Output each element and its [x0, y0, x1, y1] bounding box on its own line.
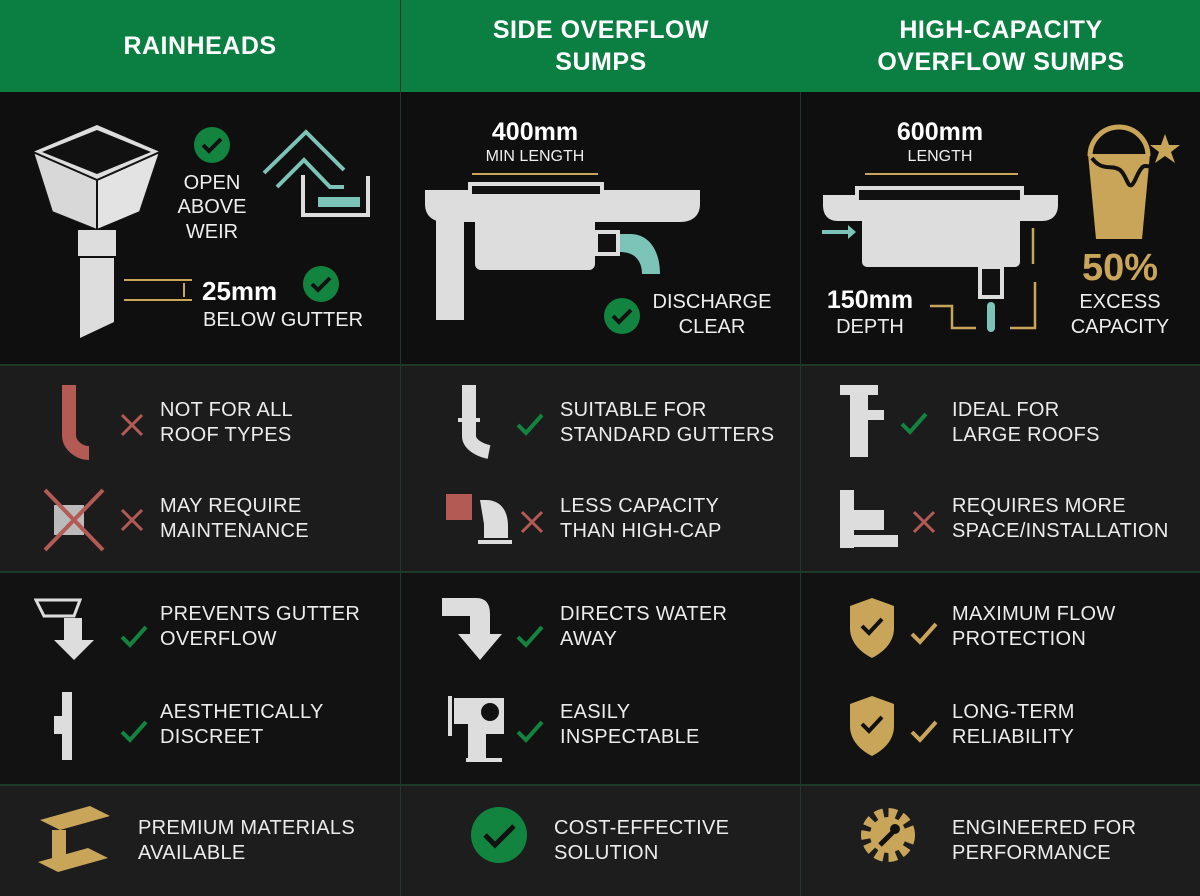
item: prevents gutter overflow [34, 598, 360, 660]
text: open above weir: OPEN [184, 172, 240, 194]
dimension: 25mm [124, 280, 192, 300]
item: long-term reliability: LONG-TERM [952, 701, 1075, 723]
item: prevents gutter overflow: OVERFLOW [160, 628, 277, 650]
item: not for all roof types [62, 385, 293, 460]
text: 150mm depth: 150mm [827, 286, 913, 314]
item: long-term reliability [850, 696, 1075, 756]
text: 25mm below gutter: BELOW GUTTER [203, 309, 363, 331]
item: easily inspectable: INSPECTABLE [560, 726, 700, 748]
text: 50% excess capacity: EXCESS [1079, 291, 1161, 313]
text: open above weir: ABOVE [178, 196, 246, 218]
item: ideal for large roofs: LARGE ROOFS [952, 424, 1100, 446]
item: requires more space: SPACE/INSTALLATION [952, 520, 1169, 542]
panel: high-capacity diagram [822, 118, 1180, 338]
item: less capacity: LESS CAPACITY [560, 495, 719, 517]
footer: premium materials: PREMIUM MATERIALS [138, 817, 355, 839]
item: not for all roof types: ROOF TYPES [160, 424, 292, 446]
text: discharge clear [653, 291, 771, 338]
item: easily inspectable [448, 696, 700, 762]
text: open above weir: WEIR [186, 221, 238, 243]
header: rainheads: RAINHEADS [123, 32, 277, 60]
item: requires more space [840, 490, 1169, 548]
panel: side overflow sump diagram [425, 118, 771, 338]
text: open above weir [178, 172, 246, 243]
footer: engineered for performance: PERFORMANCE [952, 842, 1111, 864]
header: side overflow sumps [401, 0, 801, 92]
header: rainheads [0, 0, 400, 92]
item: directs water away [442, 598, 727, 660]
text: 600mm: 600mm [897, 118, 983, 146]
text: 25mm below gutter: 25mm [202, 276, 277, 306]
footer: engineered for performance: ENGINEERED FOR [952, 817, 1136, 839]
text: 50% excess capacity: 50% [1082, 247, 1158, 289]
row backgrounds [0, 92, 1200, 365]
header: high-capacity overflow sumps [801, 0, 1200, 92]
item: maximum flow protection: MAXIMUM FLOW [952, 603, 1116, 625]
text: 400mm [486, 118, 584, 165]
footer: cost-effective solution: COST-EFFECTIVE [554, 817, 729, 839]
header: high-capacity overflow sumps: HIGH-CAPACITY [899, 16, 1103, 44]
text: 600mm [897, 118, 983, 165]
text: discharge clear: DISCHARGE [653, 291, 771, 313]
icon: check open above weir [194, 127, 230, 163]
item: suitable for standard gutters: STANDARD GUTTERS [560, 424, 774, 446]
footer: premium materials: AVAILABLE [138, 842, 246, 864]
icon: bucket [1088, 127, 1180, 239]
header: high-capacity overflow sumps: OVERFLOW SUMPS [877, 48, 1125, 76]
item: less capacity [446, 494, 722, 544]
text: 400mm: MIN LENGTH [486, 148, 584, 165]
footer: cost-effective solution: SOLUTION [554, 842, 659, 864]
item: easily inspectable: EASILY [560, 701, 630, 723]
text: 600mm: LENGTH [908, 148, 972, 165]
footer: engineered for performance [861, 808, 1136, 864]
header: side overflow sumps: SUMPS [555, 48, 647, 76]
panel: rainhead diagram [34, 125, 370, 338]
icon: large sump [822, 188, 1058, 332]
text: 25mm below gutter [202, 276, 363, 331]
icon: rainhead [33, 125, 160, 338]
item: maximum flow protection: PROTECTION [952, 628, 1086, 650]
item: may require maintenance: MAINTENANCE [160, 520, 309, 542]
item: directs water away: DIRECTS WATER [560, 603, 727, 625]
icon: sump [425, 184, 700, 320]
text: 50% excess capacity: CAPACITY [1071, 316, 1169, 338]
text: 150mm depth [827, 286, 913, 338]
footer: premium materials [38, 806, 355, 872]
item: suitable for standard gutters: SUITABLE FOR [560, 399, 707, 421]
item: less capacity: THAN HIGH-CAP [560, 520, 722, 542]
item: aesthetically discreet: AESTHETICALLY [160, 701, 324, 723]
item: aesthetically discreet: DISCREET [160, 726, 264, 748]
icon: check discharge [604, 298, 640, 334]
header: side overflow sumps: SIDE OVERFLOW [493, 16, 709, 44]
item: requires more space: REQUIRES MORE [952, 495, 1126, 517]
item: not for all roof types: NOT FOR ALL [160, 399, 293, 421]
text: 150mm depth: DEPTH [836, 316, 904, 338]
icon: check 25mm [303, 266, 339, 302]
item: directs water away: AWAY [560, 628, 617, 650]
item: maximum flow protection [850, 598, 1116, 658]
item: may require maintenance: MAY REQUIRE [160, 495, 301, 517]
text: 50% excess capacity [1071, 247, 1169, 338]
icon: weir overflow [264, 132, 368, 215]
item: prevents gutter overflow: PREVENTS GUTTER [160, 603, 360, 625]
text: discharge clear: CLEAR [679, 316, 745, 338]
footer: cost-effective solution [471, 807, 729, 864]
item: aesthetically discreet [54, 692, 324, 760]
item: ideal for large roofs: IDEAL FOR [952, 399, 1060, 421]
item: suitable for standard gutters [458, 385, 774, 459]
item: long-term reliability: RELIABILITY [952, 726, 1074, 748]
item: may require maintenance [44, 488, 309, 552]
text: 400mm: 400mm [492, 118, 578, 146]
item: ideal for large roofs [840, 385, 1100, 457]
